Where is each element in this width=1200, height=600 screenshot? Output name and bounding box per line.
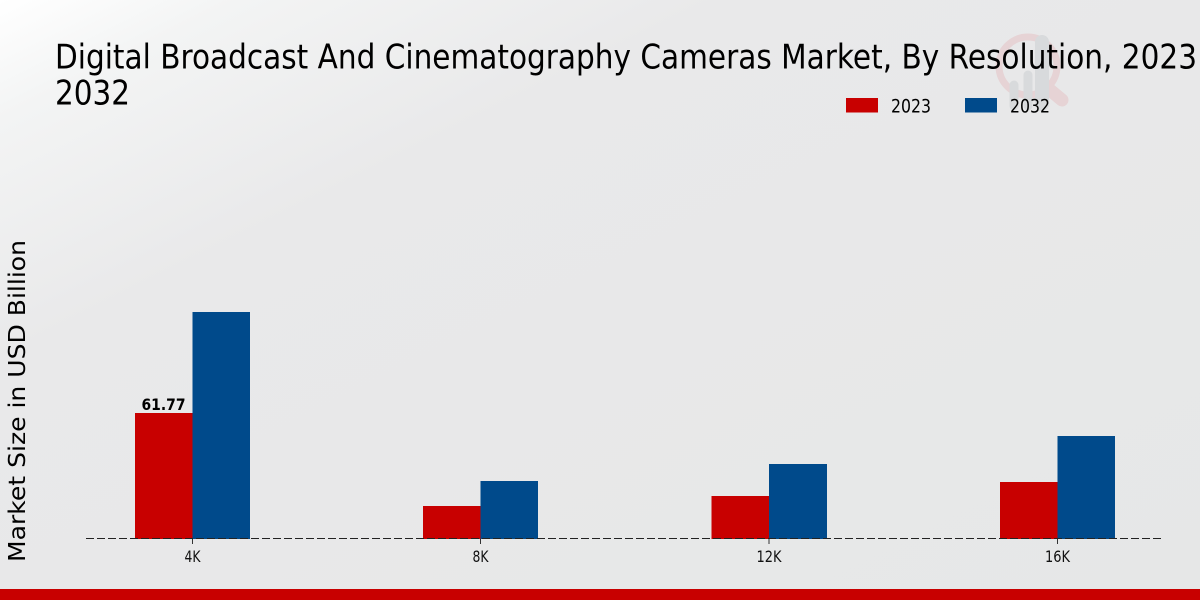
bars: 4K bbox=[135, 312, 250, 539]
x axis labels bbox=[184, 547, 1070, 566]
icon: watermark magnifier with bars bbox=[999, 37, 1062, 106]
footer bar bbox=[0, 589, 1200, 600]
title: 2032 bbox=[55, 74, 130, 114]
x axis labels: 12K bbox=[756, 547, 782, 566]
legend item 2023: 2023 bbox=[891, 96, 931, 118]
x axis baseline bbox=[86, 538, 1164, 540]
x axis ticks bbox=[192, 539, 1058, 544]
bars: 12K bbox=[712, 464, 827, 539]
legend bbox=[846, 96, 1050, 118]
data label 61.77: 61.77 bbox=[142, 395, 186, 414]
y axis label: Market Size in USD Billion bbox=[5, 240, 31, 562]
x axis labels: 16K bbox=[1045, 547, 1070, 566]
legend item 2023 bbox=[846, 96, 931, 118]
title bbox=[55, 38, 1197, 114]
bars: 16K bbox=[1000, 436, 1115, 539]
x axis labels: 8K bbox=[472, 547, 489, 566]
legend item 2032 bbox=[965, 96, 1050, 118]
bar chart bbox=[86, 312, 1164, 566]
legend item 2032: 2032 bbox=[1010, 96, 1050, 118]
x axis labels: 4K bbox=[184, 547, 201, 566]
bars: 8K bbox=[423, 481, 538, 539]
